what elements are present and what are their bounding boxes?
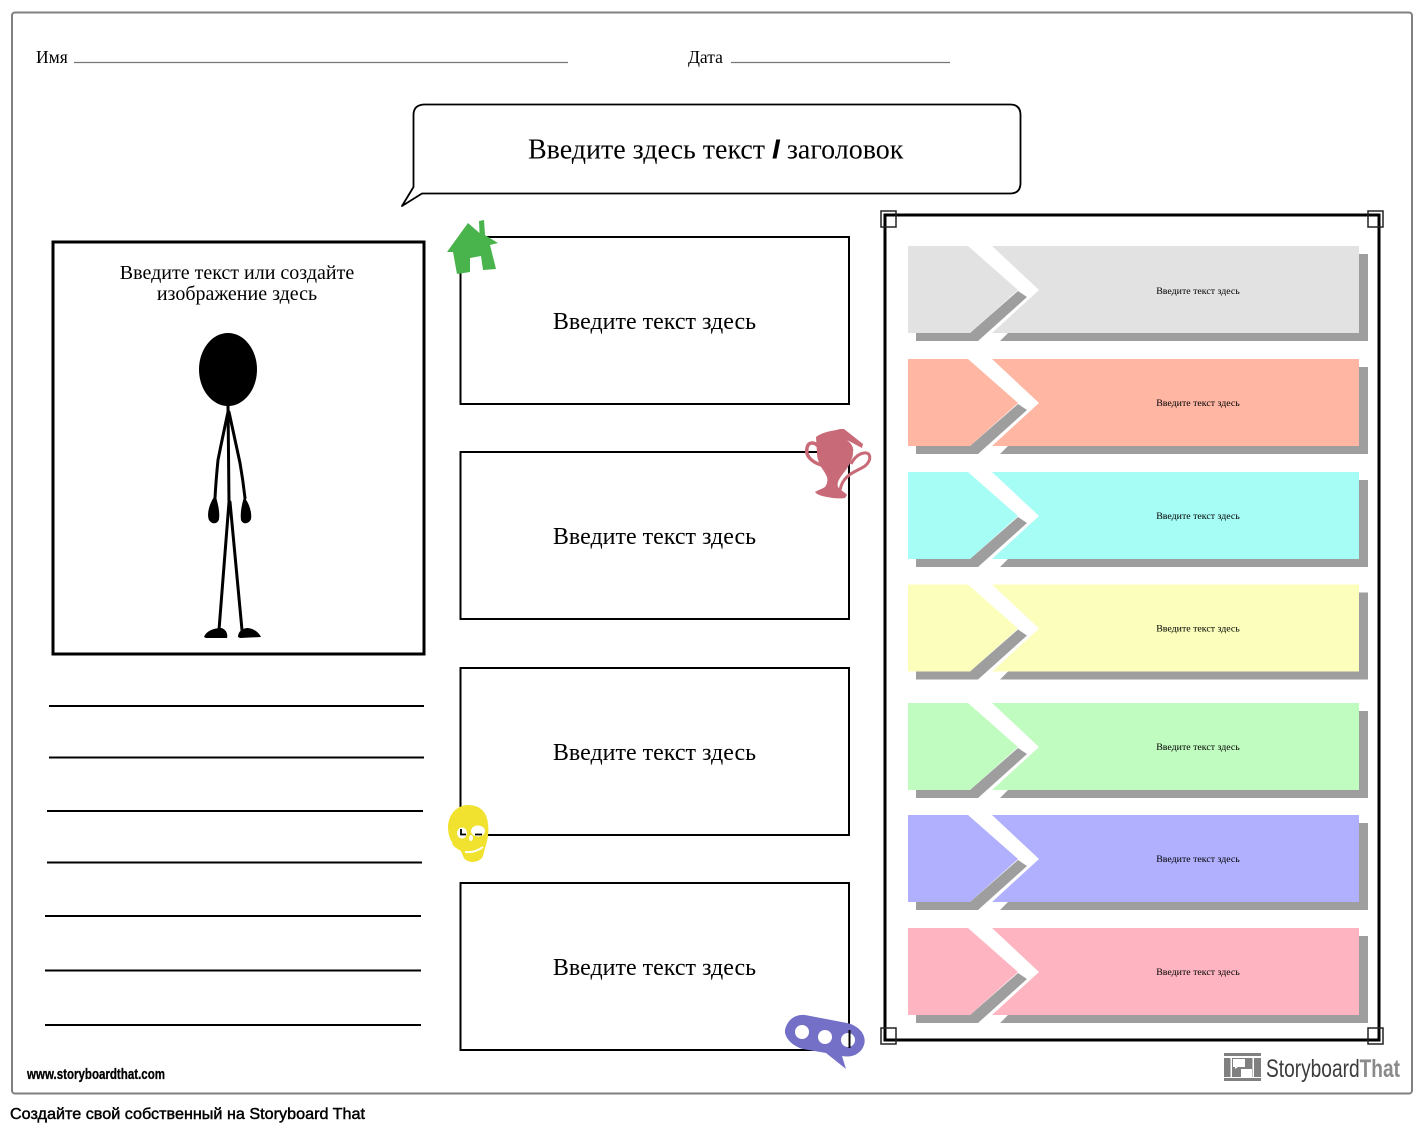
text box 1 <box>460 237 849 404</box>
arrow list panel <box>881 211 1383 1044</box>
text box 3 <box>460 668 849 835</box>
title speech bubble <box>402 104 1020 206</box>
character panel <box>53 242 424 654</box>
arrow row 4 <box>908 584 1368 680</box>
arrow row 6 <box>908 815 1368 910</box>
text box 2 <box>460 452 849 619</box>
logo: StoryboardThat: StoryboardThat <box>1266 1055 1401 1083</box>
selection handles <box>881 211 1383 1044</box>
arrow row 6: Введите текст здесь <box>1156 854 1240 865</box>
website label: www.storyboardthat.com <box>26 1067 165 1083</box>
arrow row 1 <box>908 246 1368 341</box>
text box 4: Введите текст здесь <box>553 955 756 981</box>
title speech bubble: Введите здесь текст I заголовок <box>528 134 904 166</box>
arrow row 4: Введите текст здесь <box>1156 624 1240 634</box>
name field: Имя <box>36 47 68 67</box>
icon: chat bubble <box>785 1015 865 1069</box>
arrow row 3: Введите текст здесь <box>1156 511 1240 522</box>
footer caption: Создайте свой собственный на Storyboard That <box>10 1106 366 1123</box>
arrow row 3 <box>908 472 1368 567</box>
panel caption: изображение здесь <box>157 283 317 305</box>
arrow row 7 <box>908 928 1368 1023</box>
arrow row 1: Введите текст здесь <box>1156 286 1240 297</box>
icon: trophy <box>807 429 870 498</box>
writing lines <box>45 706 424 1025</box>
logo: StoryboardThat <box>1224 1053 1401 1083</box>
text box 3: Введите текст здесь <box>553 740 756 766</box>
arrow row 2: Введите текст здесь <box>1156 398 1240 409</box>
text box 4 <box>460 883 849 1050</box>
arrow row 5 <box>908 703 1368 798</box>
arrow row 7: Введите текст здесь <box>1156 967 1240 978</box>
date field: Дата <box>688 47 723 67</box>
arrow row 2 <box>908 359 1368 454</box>
icon: skull <box>448 805 488 862</box>
text box 2: Введите текст здесь <box>553 524 756 550</box>
arrow row 5: Введите текст здесь <box>1156 742 1240 753</box>
icon: house <box>447 220 498 274</box>
panel caption: Введите текст или создайте <box>120 262 354 284</box>
text box 1: Введите текст здесь <box>553 309 756 335</box>
stick figure <box>199 333 261 638</box>
